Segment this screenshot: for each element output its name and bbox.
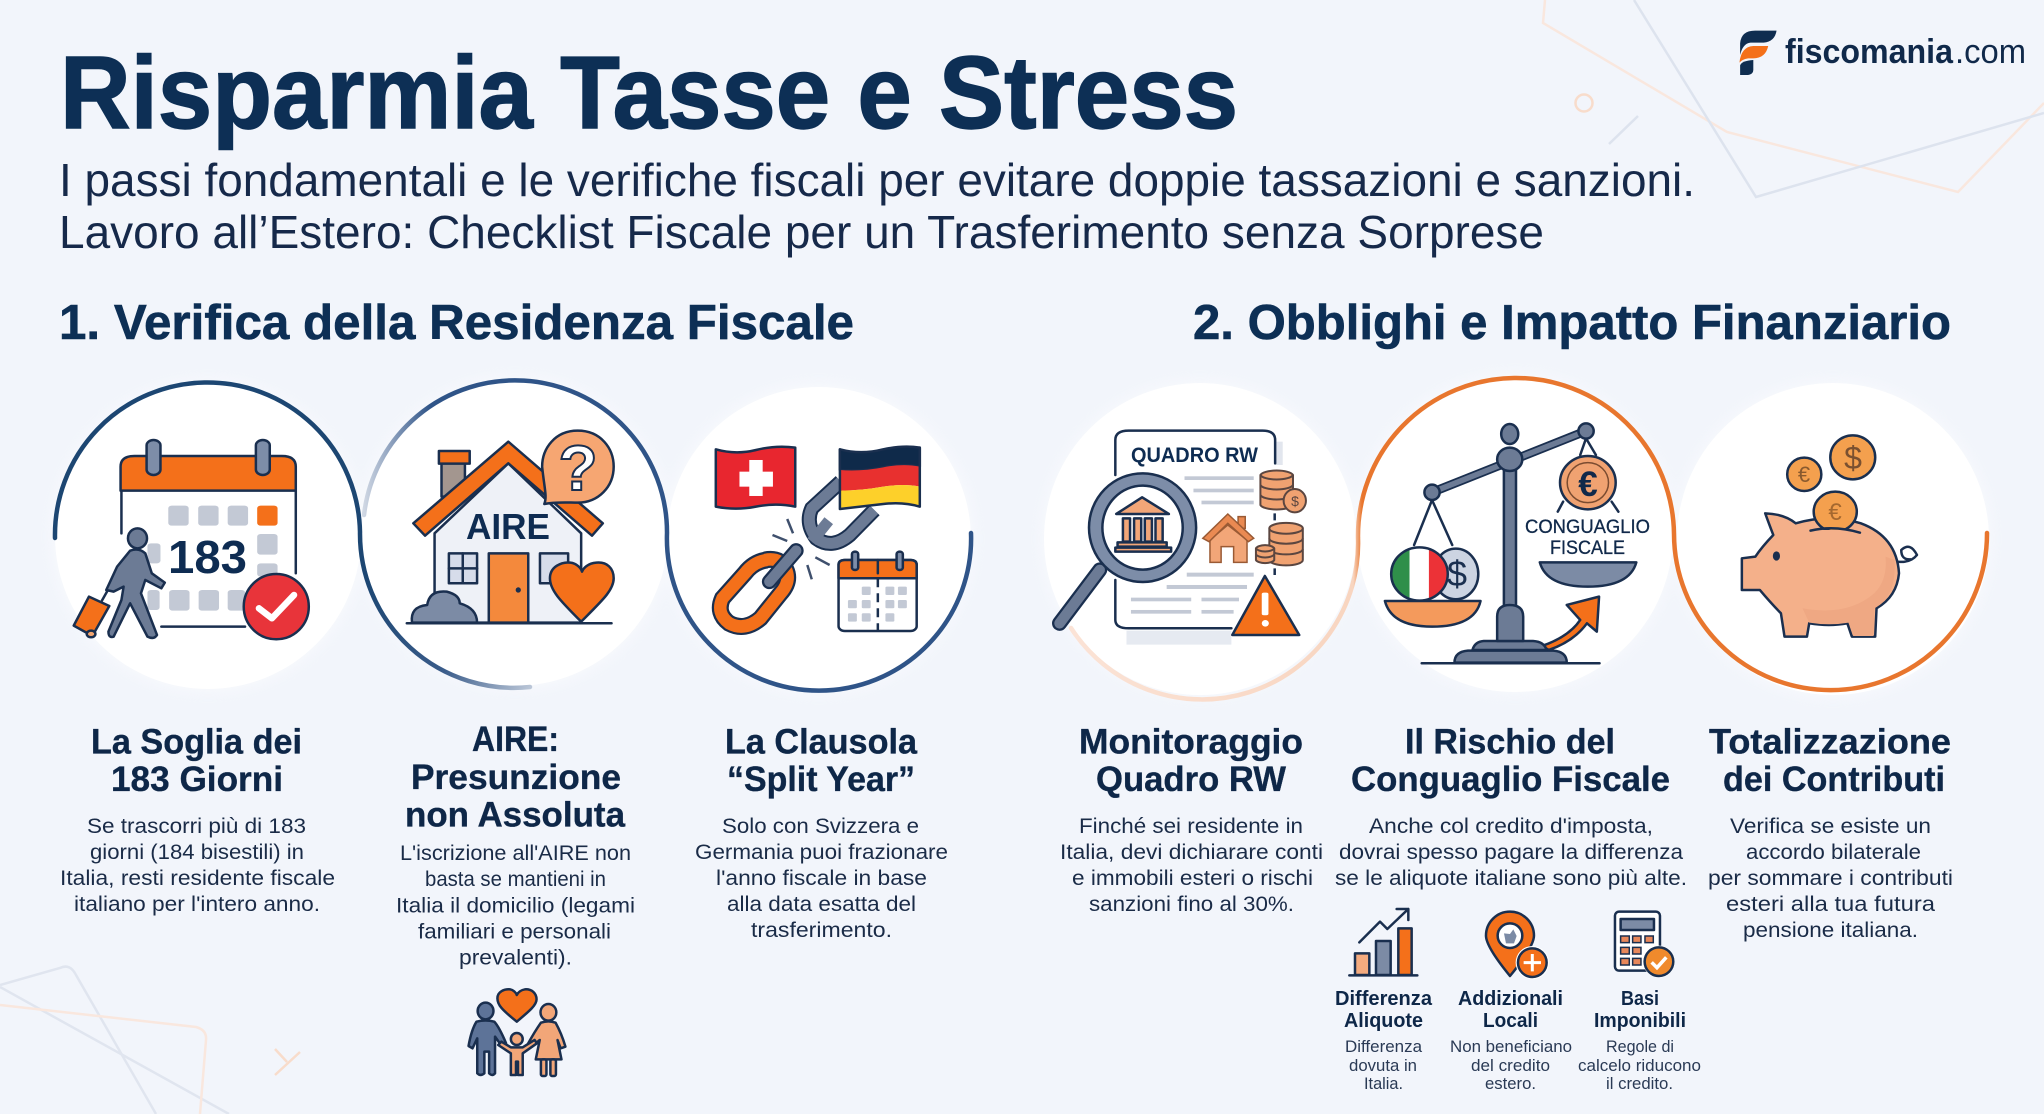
icon: balance scale: € [1578, 465, 1598, 504]
sub-item: differenza aliquote: Aliquote [1344, 1010, 1423, 1032]
text: aire: familiari e personali [418, 920, 611, 944]
icon: house aire: AIRE [466, 506, 550, 547]
sub-item: addizionali locali [1450, 912, 1572, 1093]
icon: balance scale: $ [1447, 553, 1467, 594]
text: totalizzazione: esteri alla tua futura [1726, 892, 1935, 916]
sub-item: basi imponibili: calcelo riducono [1578, 1057, 1701, 1075]
icon: balance scale [1385, 423, 1650, 663]
logo: fiscomania.com: .com [1955, 33, 2026, 71]
icon: balance scale: CONGUAGLIO [1525, 517, 1650, 538]
icon: map pin with plus [1486, 912, 1549, 979]
icon: bar chart with arrow [1349, 909, 1417, 975]
icon: flags, broken chain and split calendar [716, 447, 920, 631]
text: split year [695, 814, 948, 942]
heading: la soglia [91, 722, 302, 799]
icon: house aire: ? [558, 432, 598, 504]
text: aire [396, 841, 635, 970]
heading: split year: La Clausola [725, 722, 918, 762]
icon: house aire [407, 431, 614, 623]
sub-item: differenza aliquote: Differenza [1335, 988, 1433, 1010]
text: aire: Italia il domicilio (legami [396, 894, 635, 918]
text: conguaglio: dovrai spesso pagare la differenza [1339, 840, 1683, 864]
heading: conguaglio: Conguaglio Fiscale [1351, 760, 1670, 799]
text: split year: Germania puoi frazionare [695, 840, 948, 864]
title: Risparmia Tasse e Stress [60, 35, 1238, 150]
text: la soglia [60, 814, 335, 916]
text: monitoraggio: e immobili esteri o rischi [1072, 866, 1313, 890]
heading: aire: AIRE: [472, 720, 559, 759]
sub-item: addizionali locali: estero. [1485, 1075, 1536, 1093]
icon: calculator with check [1615, 912, 1675, 978]
icon: piggy bank with coins [1742, 435, 1917, 637]
wave outline: circle 2 into circle 3 [364, 380, 971, 691]
text: totalizzazione: Verifica se esiste un [1730, 814, 1931, 838]
sub-item: basi imponibili: il credito. [1606, 1075, 1673, 1093]
text: monitoraggio: sanzioni fino al 30%. [1089, 892, 1294, 916]
subtitle: Lavoro all’Estero: Checklist Fiscale per un Trasferimento senza Sorprese [59, 206, 1544, 258]
sub-item: addizionali locali: Locali [1483, 1010, 1538, 1032]
panel: quadro rw [1044, 383, 1356, 916]
wave outline: circles 4, 5 and 6 [1071, 378, 1987, 699]
sub-item: differenza aliquote: Italia. [1364, 1075, 1403, 1093]
heading: aire [405, 720, 626, 834]
logo: fiscomania.com: fiscomania [1785, 33, 1954, 71]
text: conguaglio: se le aliquote italiane sono più alte. [1335, 866, 1687, 890]
heading: la soglia: La Soglia dei [91, 722, 302, 762]
heading: totalizzazione: Totalizzazione [1709, 722, 1951, 762]
heading: split year [725, 722, 918, 799]
panel: split year [667, 387, 971, 942]
text: split year: Solo con Svizzera e [722, 814, 919, 838]
icon: quadro rw document with magnifier [1060, 431, 1306, 645]
heading: conguaglio [1351, 722, 1670, 799]
subtitle [59, 154, 1695, 258]
heading: aire: non Assoluta [405, 796, 626, 834]
heading: monitoraggio: Monitoraggio [1079, 722, 1303, 762]
sub-item: addizionali locali: Non beneficiano [1450, 1038, 1572, 1056]
sub-item: basi imponibili: Imponibili [1594, 1010, 1686, 1032]
text: la soglia: giorni (184 bisestili) in [90, 840, 304, 864]
sub-item: differenza aliquote: Differenza [1345, 1038, 1423, 1056]
text: split year: l'anno fiscale in base [716, 866, 927, 890]
text: totalizzazione: accordo bilaterale [1746, 840, 1921, 864]
heading: aire: Presunzione [411, 758, 621, 797]
text: split year: alla data esatta del [727, 892, 916, 916]
icon: balance scale: FISCALE [1550, 538, 1625, 559]
sub-item: basi imponibili: Basi [1621, 988, 1659, 1010]
heading: section 1: 1. Verifica della Residenza Fiscale [59, 296, 854, 350]
icon: piggy bank with coins: € [1828, 499, 1842, 526]
icon: calendar with traveller: 183 [168, 531, 247, 583]
text: la soglia: Italia, resti residente fiscale [60, 866, 335, 890]
heading: la soglia: 183 Giorni [111, 760, 283, 799]
text: totalizzazione: pensione italiana. [1743, 918, 1918, 942]
heading: totalizzazione [1709, 722, 1951, 799]
text: split year: trasferimento. [751, 918, 892, 942]
icon: quadro rw document with magnifier: QUADRO RW [1131, 444, 1258, 467]
heading: split year: “Split Year” [727, 760, 915, 799]
text: aire: basta se mantieni in [425, 867, 606, 891]
sub-item: basi imponibili [1578, 912, 1701, 1093]
sub-item: addizionali locali: Addizionali [1458, 988, 1563, 1010]
wave outline: circle 1 into circle 2 [55, 382, 530, 688]
panel: conguaglio fiscale [1335, 376, 1701, 1093]
text: la soglia: Se trascorri più di 183 [87, 814, 306, 838]
icon: piggy bank with coins: € [1798, 462, 1810, 487]
text: conguaglio [1335, 814, 1687, 890]
heading: totalizzazione: dei Contributi [1723, 760, 1945, 799]
sub-item: differenza aliquote: dovuta in [1349, 1057, 1417, 1075]
sub-item: basi imponibili: Regole di [1606, 1038, 1674, 1056]
text: monitoraggio [1060, 814, 1323, 916]
icon: family with heart [469, 989, 565, 1076]
text: conguaglio: Anche col credito d'imposta, [1369, 814, 1653, 838]
heading: monitoraggio [1079, 722, 1303, 799]
text: totalizzazione: per sommare i contributi [1708, 866, 1953, 890]
panel: soglia 183 giorni [55, 383, 361, 916]
text: monitoraggio: Italia, devi dichiarare conti [1060, 840, 1323, 864]
heading: section 2: 2. Obblighi e Impatto Finanziario [1193, 296, 1951, 350]
logo: fiscomania.com [1739, 31, 2026, 75]
icon: quadro rw document with magnifier: $ [1291, 493, 1299, 509]
panel: aire [362, 380, 668, 1076]
text: aire: L'iscrizione all'AIRE non [400, 841, 631, 865]
text: totalizzazione [1708, 814, 1953, 942]
sub-item: differenza aliquote [1335, 909, 1433, 1093]
sub-item: addizionali locali: del credito [1471, 1057, 1550, 1075]
heading: conguaglio: Il Rischio del [1405, 722, 1615, 762]
panel: totalizzazione [1677, 383, 1989, 942]
text: la soglia: italiano per l'intero anno. [74, 892, 320, 916]
subtitle: I passi fondamentali e le verifiche fiscali per evitare doppie tassazioni e sanzioni. [59, 154, 1695, 206]
text: aire: prevalenti). [459, 946, 572, 970]
text: monitoraggio: Finché sei residente in [1079, 814, 1303, 838]
icon: calendar with traveller [74, 440, 309, 639]
heading: monitoraggio: Quadro RW [1096, 760, 1286, 799]
icon: piggy bank with coins: $ [1844, 440, 1862, 476]
